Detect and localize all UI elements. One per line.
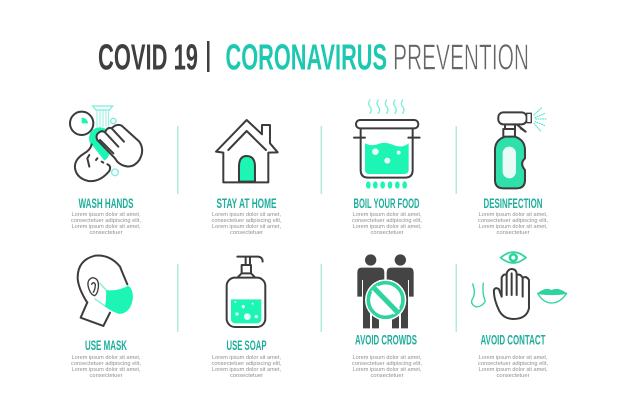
- title: [98, 36, 529, 78]
- text block: consectetuer: [370, 230, 404, 236]
- text block: Lorem ipsum dolor sit amet,: [478, 212, 548, 218]
- text block: Lorem ipsum dolor sit amet,: [72, 224, 141, 230]
- text block: consectetuer adipiscing elit,: [478, 218, 549, 224]
- title: PREVENTION: [393, 36, 529, 78]
- icon: house: [216, 120, 278, 182]
- text block: Lorem ipsum dolor sit amet,: [352, 212, 422, 218]
- text block: [478, 355, 549, 379]
- text block: consectetuer: [90, 230, 123, 236]
- icon: head with mask: [78, 256, 133, 326]
- text block: consectetuer adipiscing elit,: [71, 218, 142, 224]
- text block: Lorem ipsum dolor sit amet,: [212, 224, 282, 230]
- text block: consectetuer adipiscing elit,: [352, 218, 423, 224]
- text block: Lorem ipsum dolor sit amet,: [72, 212, 141, 218]
- heading: WASH HANDS: [78, 196, 134, 211]
- text block: consectetuer: [370, 373, 404, 379]
- heading: DESINFECTION: [484, 196, 542, 211]
- panel: avoid crowds: [352, 254, 423, 379]
- text block: consectetuer adipiscing elit,: [212, 361, 282, 367]
- panel: boil your food: [352, 100, 423, 236]
- icon: two people with prohibition sign: [357, 254, 414, 328]
- text block: consectetuer adipiscing elit,: [352, 361, 423, 367]
- panel: stay at home: [212, 120, 282, 236]
- text block: [352, 355, 423, 379]
- text block: [212, 355, 282, 379]
- text block: Lorem ipsum dolor sit amet,: [352, 367, 422, 373]
- text block: [71, 355, 142, 379]
- heading: USE SOAP: [226, 338, 266, 353]
- text block: [352, 212, 423, 236]
- text block: Lorem ipsum dolor sit amet,: [478, 367, 548, 373]
- text block: Lorem ipsum dolor sit amet,: [72, 367, 141, 373]
- panel: use mask: [71, 256, 142, 379]
- title: COVID 19: [98, 36, 198, 78]
- text block: consectetuer adipiscing elit,: [212, 218, 282, 224]
- text block: [478, 212, 549, 236]
- text block: [212, 212, 282, 236]
- title: CORONAVIRUS: [226, 36, 387, 78]
- text block: [71, 212, 142, 236]
- text block: Lorem ipsum dolor sit amet,: [212, 355, 282, 361]
- text block: consectetuer: [230, 373, 263, 379]
- text block: consectetuer: [90, 373, 123, 379]
- icon: soap dispenser: [227, 257, 265, 327]
- text block: Lorem ipsum dolor sit amet,: [352, 224, 422, 230]
- text block: Lorem ipsum dolor sit amet,: [72, 355, 141, 361]
- text block: Lorem ipsum dolor sit amet,: [212, 367, 282, 373]
- heading: BOIL YOUR FOOD: [354, 196, 420, 211]
- text block: Lorem ipsum dolor sit amet,: [352, 355, 422, 361]
- panel: desinfection: [478, 108, 549, 236]
- text block: Lorem ipsum dolor sit amet,: [478, 355, 548, 361]
- icon: hand with eye, nose and mouth: [472, 252, 567, 319]
- text block: consectetuer adipiscing elit,: [478, 361, 549, 367]
- text block: consectetuer: [230, 230, 263, 236]
- text block: Lorem ipsum dolor sit amet,: [212, 212, 282, 218]
- text block: consectetuer: [496, 373, 530, 379]
- panel: wash hands: [70, 106, 142, 236]
- icon: boiling pot: [354, 100, 420, 189]
- heading: AVOID CONTACT: [480, 332, 546, 348]
- heading: STAY AT HOME: [216, 196, 276, 211]
- text block: consectetuer adipiscing elit,: [71, 361, 142, 367]
- heading: AVOID CROWDS: [355, 332, 417, 348]
- panel: avoid contact: [472, 252, 567, 379]
- icon: washing hands: [70, 106, 142, 181]
- icon: spray bottle: [495, 108, 546, 188]
- panel: use soap: [212, 257, 282, 379]
- text block: Lorem ipsum dolor sit amet,: [478, 224, 548, 230]
- heading: USE MASK: [85, 338, 127, 353]
- text block: consectetuer: [496, 230, 530, 236]
